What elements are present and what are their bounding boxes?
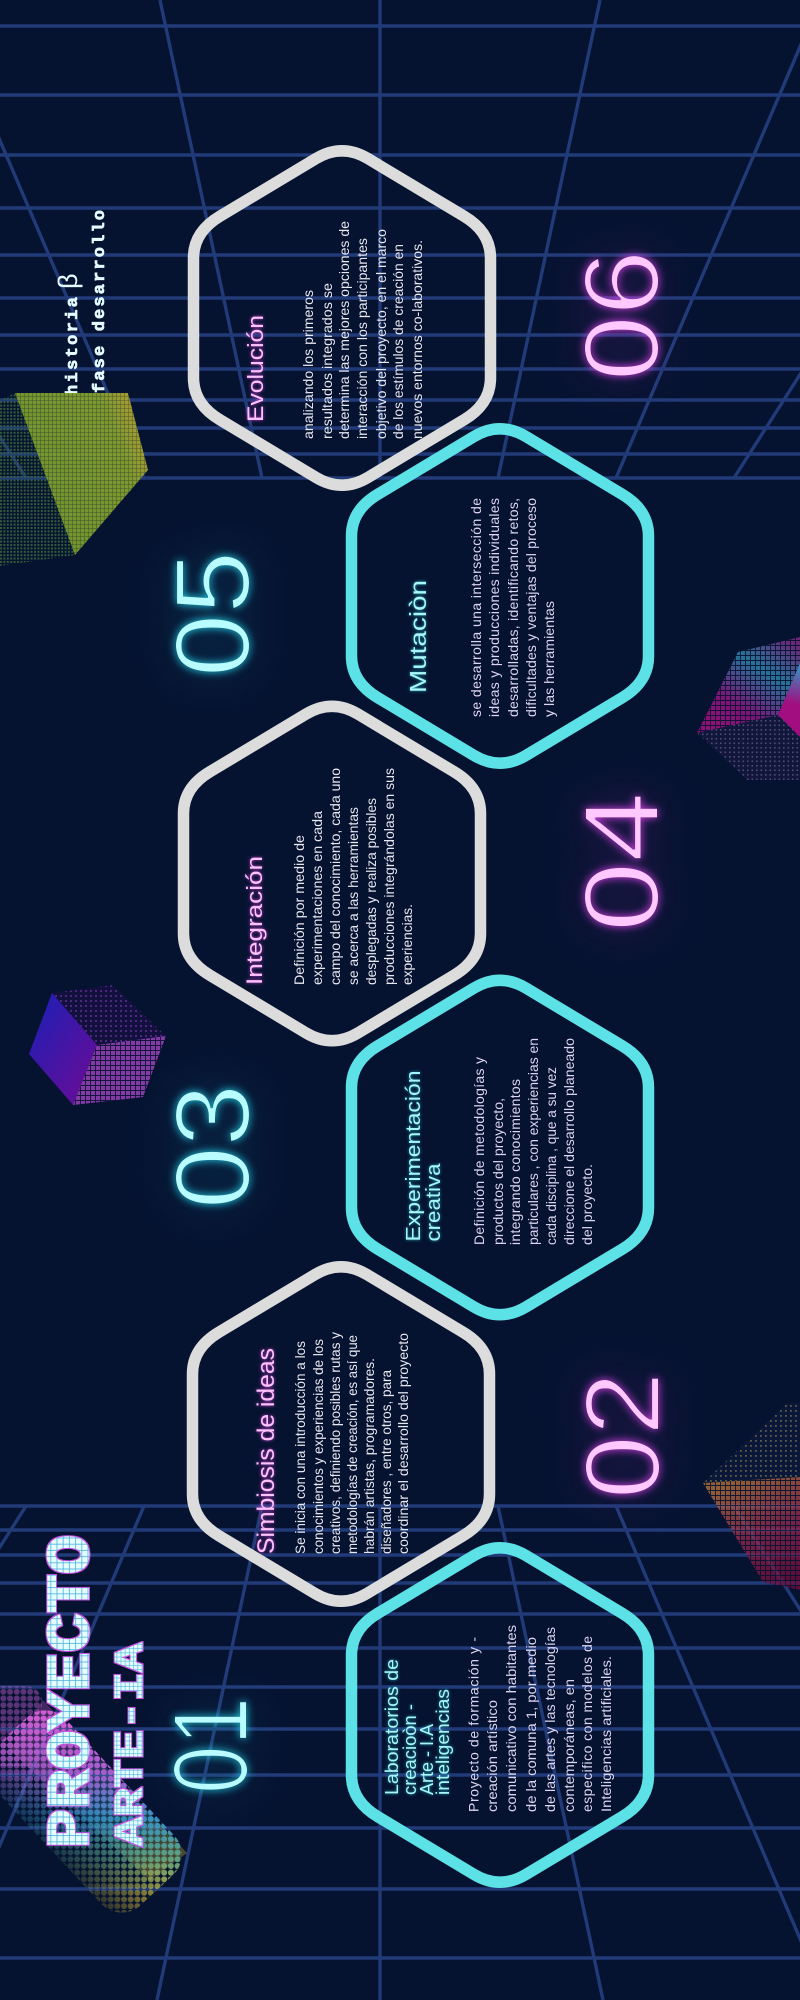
heading: Laboratorios de creacion: Laboratorios de — [381, 1659, 402, 1795]
title: PROYECTO ARTE-IA: ARTE-IA — [109, 1643, 155, 1846]
number 02: 02 — [564, 1372, 682, 1499]
number 06: 06 — [563, 250, 681, 381]
text block: Evolucion: de los estímulos de creación en — [390, 244, 406, 439]
text block: Integracion: Definición por medio de — [291, 835, 307, 985]
text block: Evolucion — [300, 221, 425, 439]
text block: Experimentacion: Definición de metodologías y — [471, 1057, 487, 1245]
heading: Mutacion: Mutaciòn — [405, 580, 431, 693]
number 04: 04 — [563, 792, 681, 932]
heading: Experimentacion creativa — [402, 1070, 445, 1242]
text block: Simbiosis: diseñadores , entre otros, para — [378, 1370, 394, 1554]
text block: Integracion: desplegadas y realiza posibles — [363, 798, 379, 985]
number 05: 05 — [154, 551, 272, 677]
text block: Laboratorios: Inteligencias artificiales. — [598, 1656, 614, 1812]
text block: Mutacion: y las herramientas — [541, 601, 557, 717]
text block: Laboratorios: Proyecto de formación y - — [466, 1637, 482, 1812]
text block: Mutacion: desarrolladas, identificando retos, — [505, 498, 521, 717]
text block: Integracion: experimentaciones en cada — [309, 811, 325, 985]
icon: gradient halftone pill — [0, 1686, 193, 1924]
text: historia beta / fase desarrollo — [53, 210, 110, 395]
heading: Evolucion: Evolución — [243, 315, 268, 422]
icon: purple halftone cube — [29, 985, 166, 1105]
panel: Simbiosis hexagon — [192, 1267, 490, 1601]
text block: Experimentacion — [471, 1038, 595, 1245]
number 01: 01 — [152, 1697, 270, 1794]
heading: Laboratorios de creacion: Arte - I.A — [416, 1723, 437, 1795]
text block: Experimentacion: particulares , con experiencias en — [525, 1038, 541, 1245]
text block: Laboratorios — [466, 1625, 614, 1812]
icon: magenta halftone cube — [697, 637, 800, 780]
text block: Laboratorios: contemporáneas, en — [561, 1679, 577, 1812]
heading: Experimentacion creativa: Experimentación — [402, 1070, 425, 1242]
text block: Evolucion: determina las mejores opciones de — [336, 221, 352, 439]
text block: Mutacion: dificultades y ventajas del proceso — [523, 498, 539, 717]
text block: Evolucion: analizando los primeros — [300, 290, 316, 439]
text: historia beta / fase desarrollo: historia — [64, 297, 83, 395]
text block: Simbiosis: creativos, definiendo posibles rutas y — [327, 1332, 343, 1554]
text block: Laboratorios: de las artes y las tecnologías — [542, 1627, 558, 1812]
heading: Laboratorios de creacion: creacioòn - — [399, 1704, 420, 1795]
text block: Laboratorios: especifico con modelos de — [579, 1636, 595, 1812]
text block: Laboratorios: de la comuna 1, por medio — [523, 1637, 539, 1812]
panel: Integracion hexagon — [184, 706, 480, 1041]
text block: Experimentacion: direccione el desarrollo planeado — [561, 1038, 577, 1245]
heading: Simbiosis de ideas: Simbiosis de ideas — [253, 1348, 280, 1554]
text block: Evolucion: interacción con los participantes — [354, 238, 370, 439]
panel: Mutacion hexagon — [352, 429, 648, 763]
text block: Simbiosis — [292, 1332, 411, 1554]
text block: Simbiosis: Se inicia con una introducción a los — [292, 1341, 308, 1554]
panel: Laboratorios hexagon — [352, 1548, 648, 1882]
text block: Integracion: experiencias. — [399, 904, 415, 985]
icon: orange halftone cube — [703, 1402, 800, 1590]
heading: Integracion: Integración — [242, 856, 267, 985]
text block: Experimentacion: cada disciplina , que a su vez — [543, 1067, 559, 1245]
text block: Integracion: se acerca a las herramientas — [345, 807, 361, 985]
text block: Integracion: producciones integrándolas en sus — [381, 768, 397, 985]
text block: Simbiosis: coordinar el desarrollo del proyecto — [395, 1333, 411, 1554]
text block: Experimentacion: productos del proyecto, — [490, 1098, 506, 1245]
heading: Experimentacion creativa: creativa — [422, 1163, 445, 1242]
text block: Mutacion: ideas y producciones individuales — [486, 498, 502, 717]
heading: Laboratorios de creacion — [381, 1659, 453, 1795]
text block: Integracion: campo del conocimiento, cada uno — [327, 768, 343, 985]
panel: Experimentacion creativa hexagon — [352, 980, 648, 1315]
text block: Laboratorios: creación artístico — [484, 1700, 500, 1812]
text block: Integracion — [291, 768, 415, 985]
text block: Simbiosis: conocimientos y experiencias de los — [310, 1339, 326, 1554]
number 03: 03 — [154, 1084, 272, 1209]
text block: Evolucion: nuevos entornos co-laborativos. — [409, 240, 425, 439]
text block: Evolucion: objetivo del proyecto, en el marco — [373, 229, 389, 439]
text block: Simbiosis: habrán artistas, programadores. — [361, 1358, 377, 1554]
text block: Mutacion: se desarrolla una intersección de — [468, 498, 484, 717]
text block: Evolucion: resultados integrados se — [319, 283, 335, 439]
panel: Evolucion hexagon — [194, 151, 490, 485]
text: historia beta / fase desarrollo: β — [53, 273, 83, 289]
text block: Experimentacion: del proyecto. — [579, 1164, 595, 1245]
text block: Laboratorios: comunicativo con habitantes — [503, 1625, 519, 1812]
text block: Experimentacion: integrando conocimientos — [507, 1079, 523, 1245]
text block: Mutacion — [468, 498, 557, 717]
text: historia beta / fase desarrollo: fase desarrollo — [91, 210, 110, 393]
text block: Simbiosis: metodologías de creación, es así que — [344, 1335, 360, 1554]
title: PROYECTO ARTE-IA — [39, 1535, 155, 1848]
icon: green halftone cube — [0, 393, 148, 566]
heading: Laboratorios de creacion: inteligencias — [432, 1689, 453, 1795]
title: PROYECTO ARTE-IA: PROYECTO — [39, 1535, 107, 1848]
